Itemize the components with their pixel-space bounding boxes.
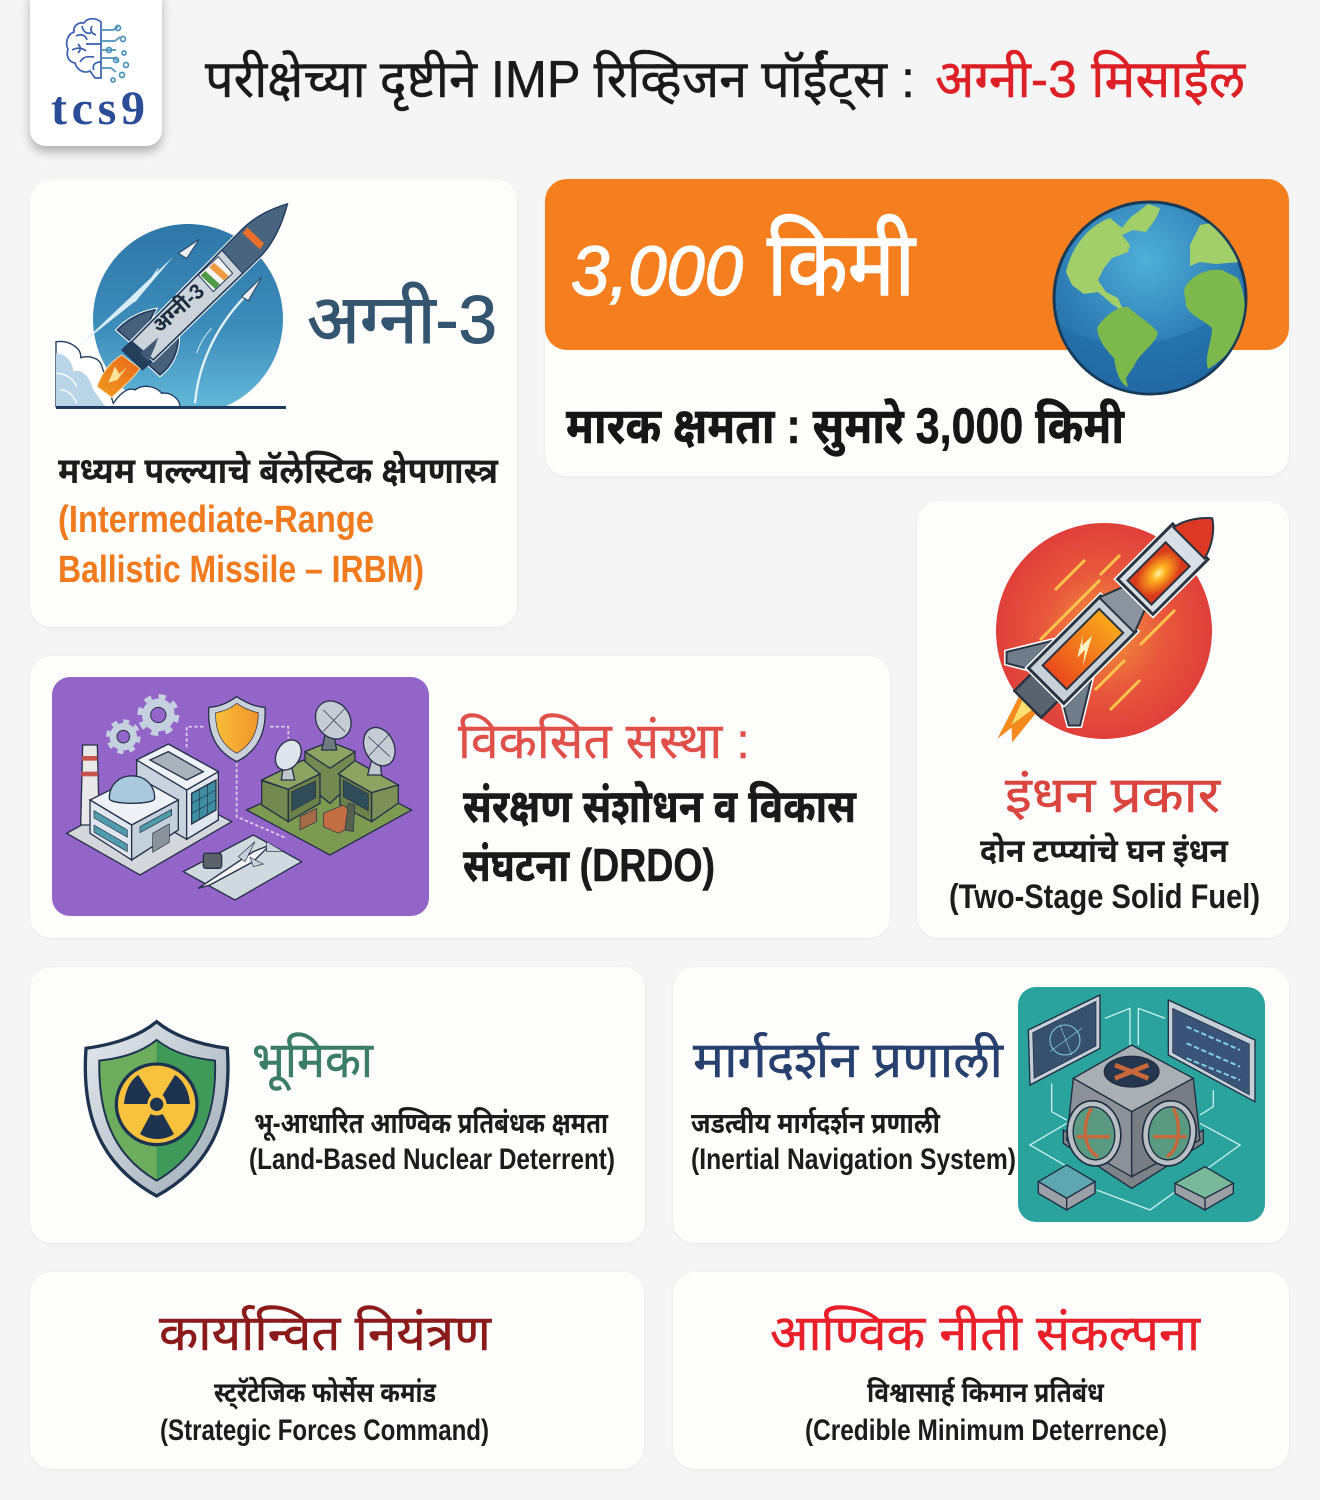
panel: operational control	[30, 1272, 644, 1469]
title highlight: अग्नी-3 मिसाईल	[935, 50, 1247, 109]
text: missile class: मध्यम पल्ल्याचे बॅलेस्टिक क्षेपणास्त्र	[58, 449, 499, 491]
icon: globe	[1054, 202, 1246, 400]
logo wordmark: tcs9	[51, 82, 145, 135]
heading: role: भूमिका	[252, 1032, 374, 1092]
illustration: research facility	[52, 677, 429, 916]
text: role	[249, 1107, 615, 1176]
text: missile class	[58, 449, 499, 591]
text: guidance: (Inertial Navigation System)	[691, 1143, 1016, 1176]
heading: fuel type: इंधन प्रकार	[1005, 767, 1222, 823]
banner text: 3,000	[571, 232, 743, 310]
illustration: inertial navigation unit	[1018, 987, 1265, 1222]
banner text	[571, 214, 916, 315]
text: DRDO: संघटना (DRDO)	[463, 839, 715, 891]
panel: Agni-3 missile class	[52, 202, 498, 628]
text: DRDO	[463, 780, 857, 891]
panel: role	[30, 967, 645, 1243]
title	[205, 50, 1247, 111]
text: Strategic Forces Command: स्ट्रॅटेजिक फोर्सेस कमांड	[214, 1375, 437, 1410]
banner: range	[545, 179, 1289, 350]
text: credible minimum deterrence: विश्वासार्ह किमान प्रतिबंध	[867, 1376, 1105, 1408]
panel: guidance system	[673, 967, 1289, 1243]
text: credible minimum deterrence: (Credible Minimum Deterrence)	[805, 1414, 1167, 1447]
panel: strike range	[545, 179, 1289, 476]
text: Strategic Forces Command	[160, 1375, 489, 1447]
text: guidance: जडत्वीय मार्गदर्शन प्रणाली	[691, 1107, 940, 1140]
icon: brain circuit	[67, 19, 128, 82]
text: missile class: (Intermediate-Range	[58, 499, 374, 541]
heading: Agni-3: अग्नी-3	[307, 282, 497, 358]
heading: developed by: विकसित संस्था :	[458, 713, 750, 769]
panel: fuel type	[917, 482, 1289, 938]
heading: operational control: कार्यान्वित नियंत्रण	[159, 1305, 492, 1361]
text: fuel type: दोन टप्प्यांचे घन इंधन	[980, 831, 1229, 869]
text: role: भू-आधारित आण्विक प्रतिबंधक क्षमता	[254, 1107, 608, 1141]
text: guidance	[691, 1107, 1016, 1176]
text: DRDO: संरक्षण संशोधन व विकास	[463, 780, 857, 832]
heading: guidance: मार्गदर्शन प्रणाली	[693, 1032, 1004, 1088]
text: credible minimum deterrence	[805, 1376, 1167, 1447]
text: fuel type: (Two-Stage Solid Fuel)	[949, 878, 1260, 916]
text: missile class: Ballistic Missile – IRBM)	[58, 549, 424, 591]
text: strike range: मारक क्षमता : सुमारे 3,000 किमी	[566, 398, 1125, 458]
icon: Agni-3 rocket launch	[56, 204, 287, 414]
text: Strategic Forces Command: (Strategic Forces Command)	[160, 1414, 489, 1447]
text: fuel type	[949, 831, 1260, 916]
panel: nuclear doctrine	[673, 1272, 1289, 1469]
icon: nuclear shield	[85, 1022, 228, 1196]
heading: nuclear doctrine: आण्विक नीती संकल्पना	[770, 1305, 1201, 1361]
logo card: tcs9	[30, 0, 162, 146]
icon: two-stage rocket	[958, 482, 1250, 774]
panel: developed by DRDO	[30, 656, 890, 938]
title: परीक्षेच्या दृष्टीने IMP रिव्हिजन पॉईंट्स :	[205, 50, 915, 111]
icon: Agni-3 rocket launch: अग्नी-3	[147, 279, 209, 338]
banner text: किमी	[767, 214, 916, 315]
text: role: (Land-Based Nuclear Deterrent)	[249, 1143, 615, 1176]
